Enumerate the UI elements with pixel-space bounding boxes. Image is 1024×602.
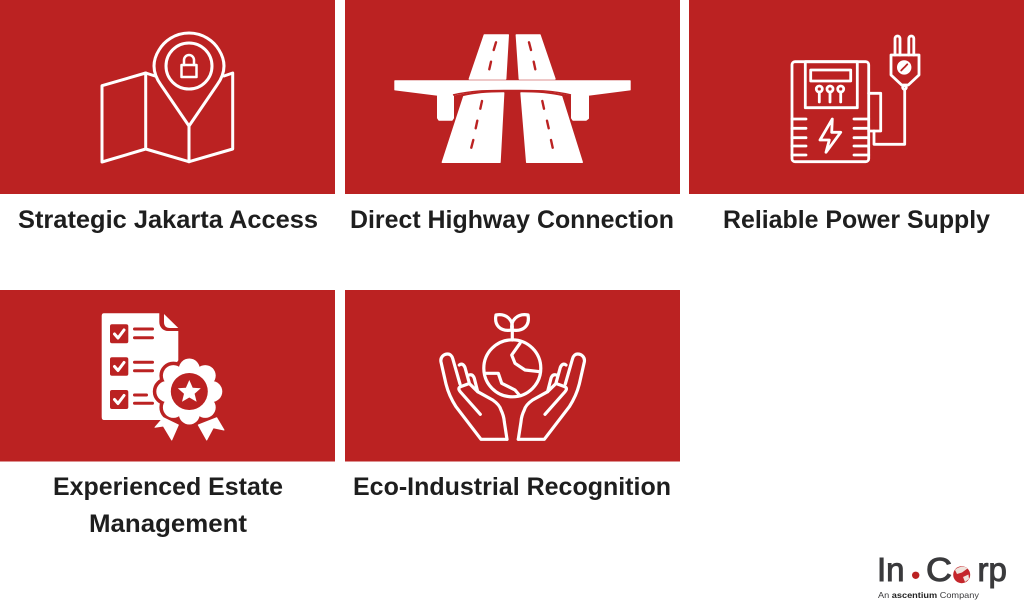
logo: InCorp, an Ascentium company: C: [926, 551, 952, 588]
logo: InCorp, an Ascentium company: [877, 551, 1007, 600]
heading: strategic jakarta access: Strategic Jakarta Access: [18, 206, 318, 234]
heading: experienced estate management: [53, 473, 283, 538]
panel: reliable power supply: [689, 0, 1024, 234]
heading: reliable power supply: Reliable Power Supply: [723, 206, 990, 234]
panel: direct highway connection: [345, 0, 680, 234]
logo: InCorp, an Ascentium company: In: [877, 551, 905, 588]
icon: map with location pin and lock: [102, 33, 233, 162]
icon: highway overpass: [395, 35, 630, 162]
heading: experienced estate management: Management: [89, 510, 248, 538]
panel: eco-industrial recognition: [345, 290, 680, 501]
logo: InCorp, an Ascentium company: An ascentium Company: [878, 590, 980, 600]
icon: hands holding globe with sprout: [441, 315, 584, 439]
panel: strategic jakarta access: [0, 0, 335, 234]
icon: electrical meter with plug: [792, 36, 919, 162]
icon: checklist document with award rosette: [102, 313, 224, 440]
heading: direct highway connection: Direct Highway Connection: [350, 206, 674, 234]
panel: experienced estate management: [0, 290, 335, 538]
heading: eco-industrial recognition: Eco-Industrial Recognition: [353, 473, 671, 501]
heading: experienced estate management: Experienced Estate: [53, 473, 283, 501]
logo: InCorp, an Ascentium company: rp: [978, 551, 1007, 588]
